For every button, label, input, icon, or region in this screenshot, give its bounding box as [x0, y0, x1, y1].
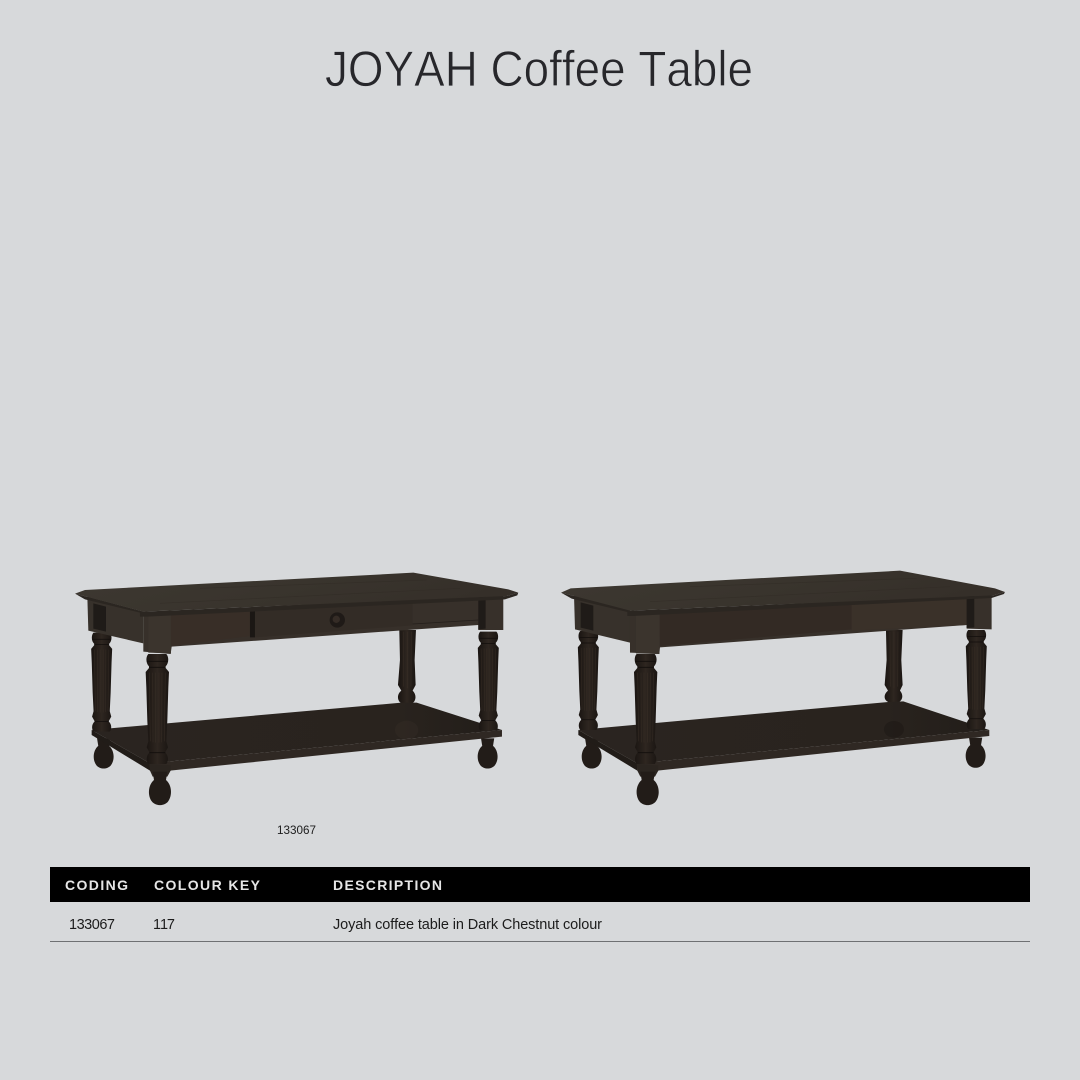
specification table [50, 867, 1030, 942]
row: description: Joyah coffee table in Dark Chestnut colour [333, 917, 602, 933]
far back leg [398, 630, 416, 704]
product code caption: 133067 [277, 823, 316, 837]
front leg [634, 654, 659, 805]
drawer knob [330, 612, 345, 628]
header: colour key: COLOUR KEY [154, 877, 261, 893]
table top [561, 571, 1005, 616]
table apron [574, 593, 992, 654]
product image: table without drawer [561, 571, 1005, 805]
table header bar [50, 867, 1030, 902]
lower shelf [92, 703, 502, 771]
lower shelf [578, 701, 989, 771]
row: colour key: 117 [153, 917, 175, 933]
table apron [87, 593, 503, 654]
back bulb feet [582, 738, 986, 768]
far back leg [885, 630, 903, 703]
title: JOYAH Coffee Table [325, 41, 753, 97]
table top [75, 573, 518, 617]
header: description: DESCRIPTION [333, 877, 442, 893]
drawer front [250, 603, 478, 637]
back legs [91, 632, 499, 732]
row: code: 133067 [69, 917, 115, 933]
product image: table with drawer [75, 573, 518, 805]
back legs [578, 630, 987, 730]
header: coding: CODING [65, 877, 128, 893]
front leg [146, 654, 171, 805]
back bulb feet [94, 738, 498, 768]
